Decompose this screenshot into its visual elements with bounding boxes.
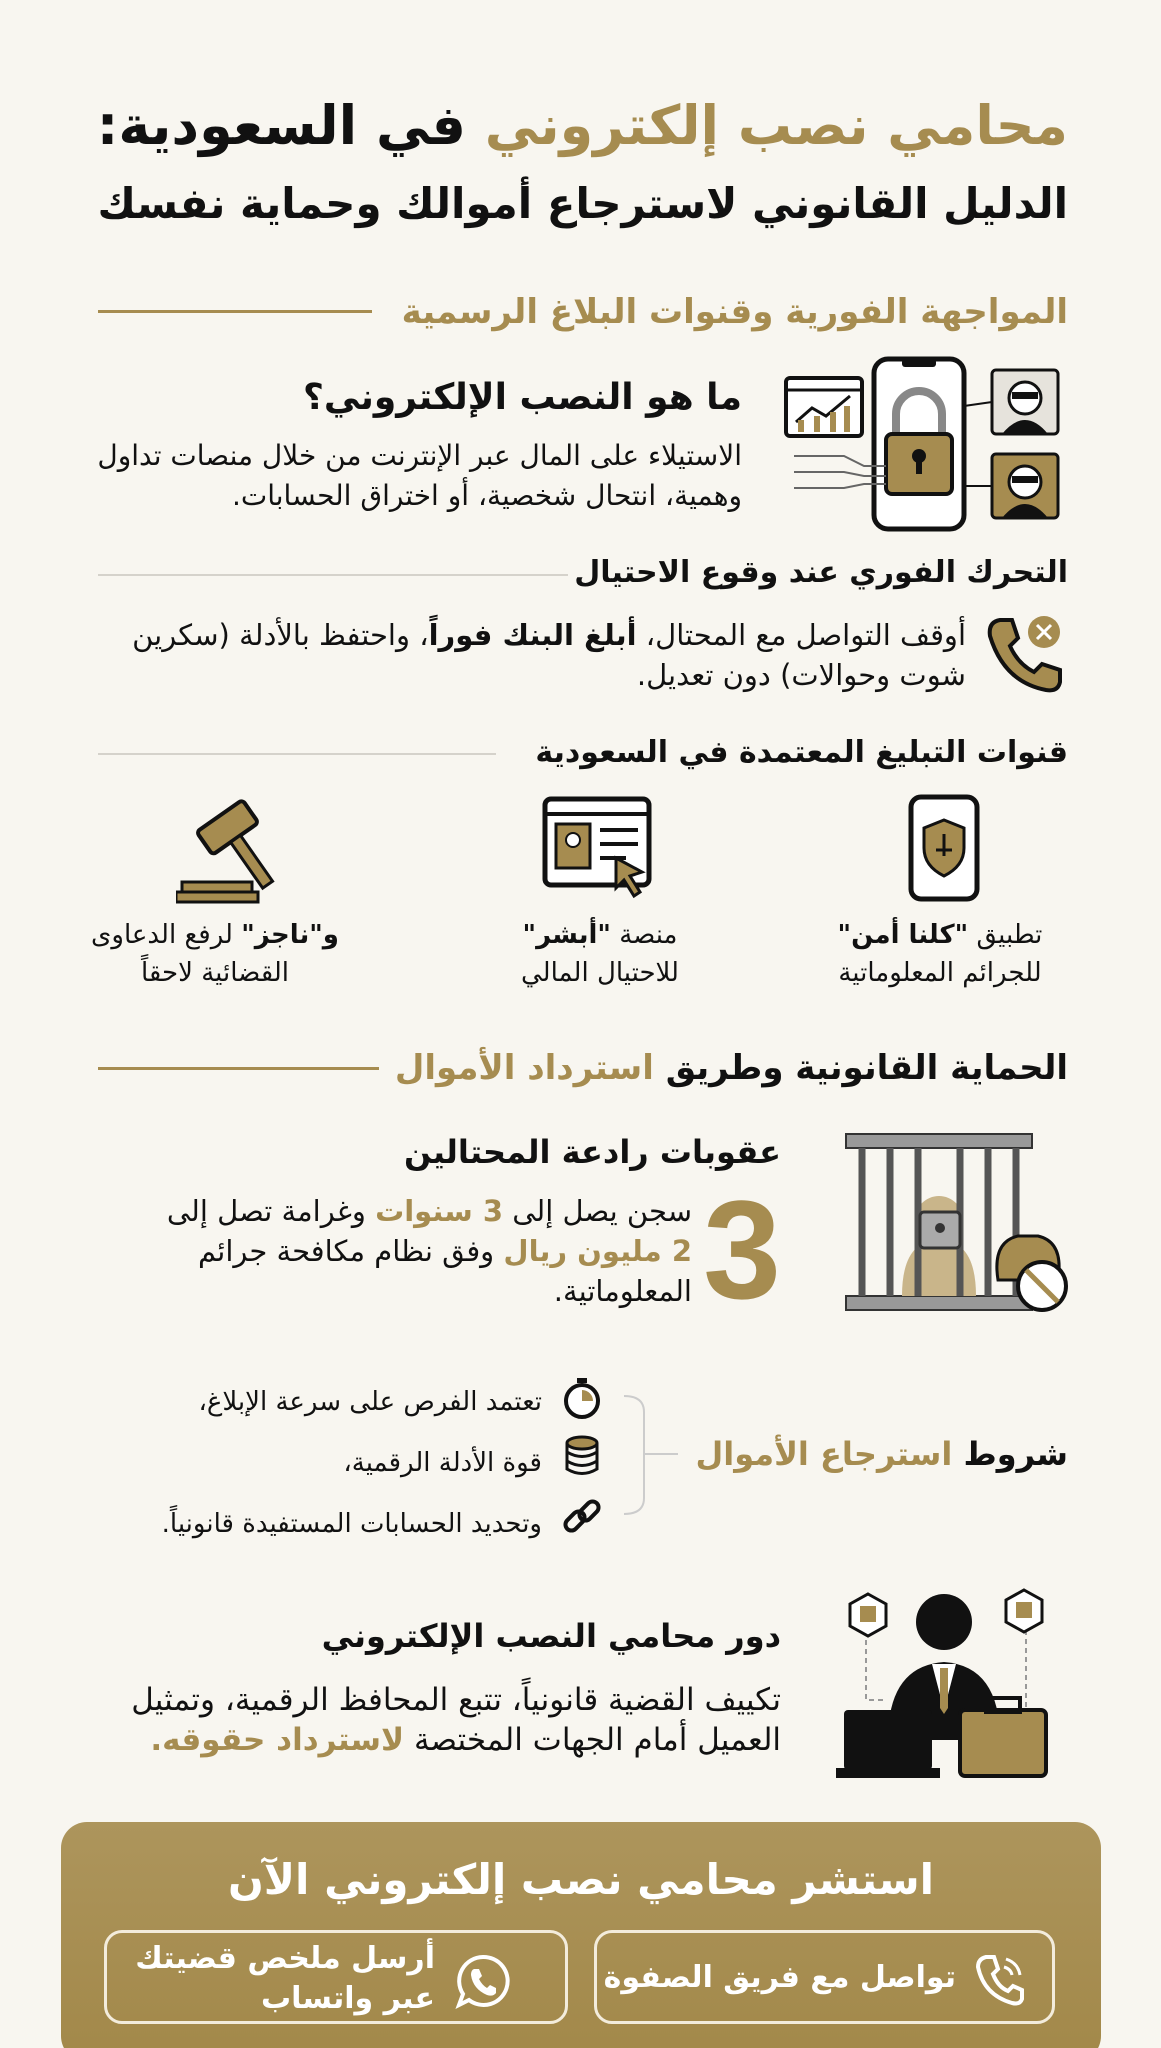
- button: whatsapp: أرسل ملخص قضيتك: [135, 1941, 435, 1976]
- icon: phone with x: [988, 616, 1062, 692]
- text: conditions: [162, 1387, 542, 1539]
- heading: recovery conditions: شروط استرجاع الأموال: [695, 1435, 1068, 1473]
- subtitle: الدليل القانوني لاسترجاع أموالك وحماية نفسك: [98, 179, 1068, 228]
- heading: immediate action: التحرك الفوري عند وقوع الاحتيال: [574, 555, 1068, 590]
- button: call team: [594, 1930, 1055, 2024]
- icon: gavel: [176, 799, 275, 904]
- label: absher: للاحتيال المالي: [521, 958, 679, 988]
- label: absher: منصة "أبشر": [523, 920, 677, 950]
- heading: lawyer role: دور محامي النصب الإلكتروني: [322, 1617, 781, 1655]
- label: najiz: و"ناجز" لرفع الدعاوى: [91, 920, 339, 950]
- button: whatsapp: عبر واتساب: [261, 1981, 435, 2016]
- label: absher: [521, 917, 679, 988]
- label: kollona amn: تطبيق "كلنا أمن": [838, 920, 1042, 950]
- list: conditions: [564, 1378, 600, 1532]
- text: immediate action: شوت وحوالات) دون تعديل.: [637, 658, 966, 692]
- icon: whatsapp: [456, 1955, 510, 2009]
- label: najiz: القضائية لاحقاً: [141, 958, 289, 988]
- text: definition: الاستيلاء على المال عبر الإنترنت من خلال منصات تداول: [97, 439, 742, 472]
- button: call team: تواصل مع فريق الصفوة: [604, 1960, 956, 1995]
- section heading 1: المواجهة الفورية وقنوات البلاغ الرسمية: [402, 292, 1068, 332]
- CTA panel: [61, 1822, 1101, 2048]
- title: محامي نصب إلكتروني في السعودية:: [97, 94, 1068, 157]
- label: najiz: [91, 920, 339, 988]
- text: penalties: [167, 1194, 692, 1308]
- text: penalties: المعلوماتية.: [554, 1274, 692, 1308]
- text: immediate action: [132, 614, 966, 692]
- label: kollona amn: [838, 917, 1042, 988]
- icon: stopwatch: [564, 1378, 600, 1419]
- icon: phone: [976, 1955, 1024, 2006]
- icon: database: [566, 1436, 598, 1475]
- text: penalties: سجن يصل إلى 3 سنوات وغرامة تصل إلى: [167, 1194, 692, 1228]
- text: lawyer role: العميل أمام الجهات المختصة لاسترداد حقوقه.: [150, 1722, 781, 1758]
- icon: absher browser: [542, 796, 652, 898]
- label: kollona amn: للجرائم المعلوماتية: [838, 958, 1042, 988]
- text: immediate action: أوقف التواصل مع المحتال، أبلغ البنك فوراً، واحتفظ بالأدلة (سكرين: [132, 618, 966, 652]
- text: definition: وهمية، انتحال شخصية، أو اختراق الحسابات.: [232, 479, 742, 512]
- icon: link: [564, 1500, 600, 1532]
- title: [97, 94, 1068, 228]
- heading: deterrent penalties: عقوبات رادعة المحتالين: [404, 1133, 781, 1171]
- text: lawyer role: [131, 1677, 781, 1758]
- text: conditions: تعتمد الفرص على سرعة الإبلاغ،: [198, 1387, 542, 1417]
- text: conditions: وتحديد الحسابات المستفيدة قانونياً.: [162, 1509, 542, 1539]
- heading: reporting channels: قنوات التبليغ المعتمدة في السعودية: [535, 735, 1068, 770]
- text: conditions: قوة الأدلة الرقمية،: [343, 1448, 542, 1478]
- text: lawyer role: تكييف القضية قانونياً، تتبع المحافظ الرقمية، وتمثيل: [131, 1682, 781, 1718]
- bracket: [624, 1395, 678, 1515]
- icon: kollona amn app: [908, 794, 980, 902]
- heading: what is e-fraud: ما هو النصب الإلكتروني؟: [303, 377, 742, 418]
- section heading 2: الحماية القانونية وطريق استرداد الأموال: [395, 1048, 1068, 1088]
- CTA title: استشر محامي نصب إلكتروني الآن: [228, 1855, 934, 1904]
- text: definition: [97, 439, 742, 512]
- icon: phone lock illustration: [784, 356, 1060, 532]
- big number 3: 3: [703, 1171, 781, 1328]
- icon: jail with money bag: [845, 1133, 1068, 1312]
- icon: lawyer with network: [836, 1588, 1048, 1778]
- button: whatsapp: [104, 1930, 568, 2024]
- text: penalties: 2 مليون ريال وفق نظام مكافحة جرائم: [198, 1234, 692, 1268]
